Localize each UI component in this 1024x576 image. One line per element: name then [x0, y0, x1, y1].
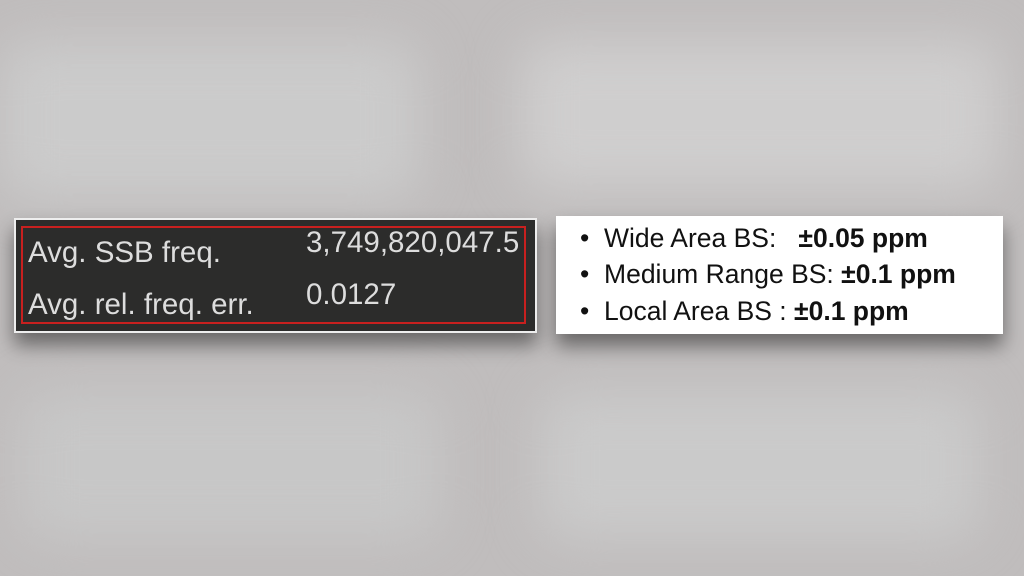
item: local area: • Local Area BS : ±0.1 ppm — [580, 296, 909, 326]
panel: dark frequency table — [14, 218, 537, 333]
label: Avg. rel. freq. err.: Avg. rel. freq. err. — [28, 288, 254, 321]
label: Avg. SSB freq.: Avg. SSB freq. — [28, 236, 221, 269]
red highlight box — [21, 226, 526, 324]
value: rel freq err: 0.0127 — [306, 278, 396, 311]
item: medium range: • Medium Range BS: ±0.1 ppm — [580, 259, 956, 289]
value: SSB freq: 3,749,820,047.5 — [306, 226, 519, 259]
panel: BS tolerance list — [556, 216, 1003, 334]
item: wide area: • Wide Area BS: ±0.05 ppm — [580, 223, 928, 253]
